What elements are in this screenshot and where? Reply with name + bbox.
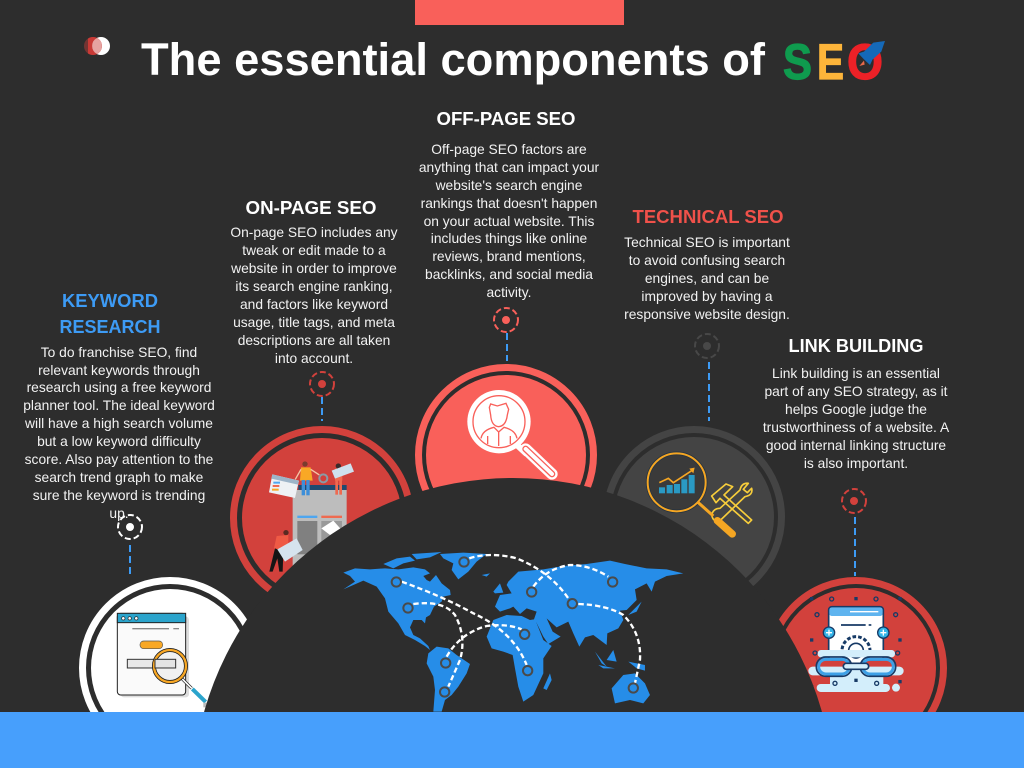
text: on-page SEO body: into account. <box>275 351 353 366</box>
heading: keyword research: KEYWORD <box>62 291 158 311</box>
text: link building body: good internal linking structure <box>766 438 946 453</box>
text: off-page SEO body: on your actual website. This <box>424 214 594 229</box>
marker: on-page SEO <box>310 372 334 396</box>
text: keyword research body: relevant keywords through <box>38 363 200 378</box>
text: link building body: is also important. <box>804 456 908 471</box>
text: off-page SEO body <box>419 142 600 300</box>
top accent bar <box>415 0 624 25</box>
text: keyword research body: score. Also pay attention to the <box>25 452 214 467</box>
text: off-page SEO body: backlinks, and social media <box>425 267 593 282</box>
text: keyword research body <box>23 345 215 521</box>
SEO logo: E <box>817 34 844 90</box>
icon: chart magnifier and tools <box>648 453 752 534</box>
text: off-page SEO body: activity. <box>487 285 531 300</box>
heading: on-page SEO: ON-PAGE SEO <box>246 198 376 218</box>
text: off-page SEO body: includes things like online <box>431 231 588 246</box>
text: on-page SEO body: its search engine ranking, <box>235 279 393 294</box>
connector: on-page SEO <box>321 397 323 421</box>
connector: keyword research <box>129 545 131 577</box>
text: off-page SEO body: rankings that doesn't happen <box>421 196 597 211</box>
semicircle: technical SEO <box>606 430 782 604</box>
text: on-page SEO body: usage, title tags, and meta <box>233 315 395 330</box>
marker: off-page SEO <box>494 308 518 332</box>
text: technical SEO body <box>624 235 790 322</box>
panel: link building <box>763 336 950 756</box>
text: keyword research body: up. <box>109 506 129 521</box>
text: on-page SEO body: On-page SEO includes any <box>230 225 398 240</box>
SEO logo: S <box>783 34 812 90</box>
text: technical SEO body: Technical SEO is important <box>624 235 790 250</box>
heading: keyword research <box>60 291 160 337</box>
panel: on-page SEO <box>230 198 410 606</box>
text: technical SEO body: engines, and can be <box>645 271 769 286</box>
heading: keyword research: RESEARCH <box>60 317 160 337</box>
SEO logo <box>783 34 885 90</box>
text: off-page SEO body: reviews, brand mentions, <box>432 249 586 264</box>
text: off-page SEO body: website's search engine <box>435 178 583 193</box>
panel: keyword research <box>23 291 258 756</box>
connector: off-page SEO <box>506 333 508 361</box>
text: on-page SEO body: and factors like keyword <box>240 297 388 312</box>
text: link building body <box>763 366 950 471</box>
text: off-page SEO body: Off-page SEO factors are <box>431 142 587 157</box>
text: on-page SEO body: tweak or edit made to a <box>242 243 386 258</box>
marker: link building <box>842 489 866 513</box>
text: keyword research body: sure the keyword is trending <box>33 488 205 503</box>
connector: technical SEO <box>708 362 710 421</box>
icon: rocket <box>858 41 885 66</box>
panel: off-page SEO <box>418 109 600 542</box>
semicircle: link building <box>768 580 944 756</box>
semicircle: keyword research <box>82 580 258 756</box>
connector: link building <box>854 517 856 576</box>
text: on-page SEO body: descriptions are all taken <box>238 333 390 348</box>
marker: keyword research <box>118 515 142 539</box>
marker: technical SEO <box>695 334 719 358</box>
map: dashed routes <box>402 555 640 687</box>
text: technical SEO body: improved by having a <box>641 289 773 304</box>
text: keyword research body: To do franchise SEO, find <box>41 345 197 360</box>
text: off-page SEO body: anything that can impact your <box>419 160 600 175</box>
title: The essential components of <box>141 34 766 85</box>
world map with routes <box>343 552 683 712</box>
text: link building body: helps Google judge the <box>785 402 927 417</box>
text: keyword research body: but a low keyword difficulty <box>37 434 201 449</box>
heading: link building: LINK BUILDING <box>788 336 924 356</box>
icon: magnifier with person <box>467 390 552 474</box>
text: keyword research body: search trend graph to make <box>35 470 204 485</box>
bottom blue bar <box>0 712 1024 768</box>
text: keyword research body: research using a free keyword <box>27 380 211 395</box>
text: keyword research body: planner tool. The ideal keyword <box>23 398 215 413</box>
text: on-page SEO body <box>230 225 398 366</box>
icon: overlapping circles <box>84 37 110 55</box>
text: on-page SEO body: website in order to improve <box>230 261 397 276</box>
map: continents <box>343 552 683 712</box>
semicircle: off-page SEO <box>418 368 594 542</box>
semicircle: on-page SEO <box>234 430 410 606</box>
panel: technical SEO <box>606 207 790 604</box>
SEO logo: O <box>847 34 883 90</box>
text: technical SEO body: to avoid confusing search <box>629 253 785 268</box>
text: link building body: part of any SEO strategy, as it <box>764 384 948 399</box>
heading: technical SEO: TECHNICAL SEO <box>632 207 784 227</box>
map: route nodes <box>392 557 638 697</box>
text: link building body: Link building is an essential <box>772 366 940 381</box>
heading: off-page SEO: OFF-PAGE SEO <box>436 109 576 129</box>
central dome <box>194 478 832 768</box>
text: link building body: trustworthiness of a website. A <box>763 420 950 435</box>
text: keyword research body: will have a high search volume <box>24 416 213 431</box>
icon: web page with chain link <box>808 597 904 692</box>
text: technical SEO body: responsive website design. <box>624 307 790 322</box>
icon: website building with people <box>269 461 354 572</box>
icon: browser with magnifier <box>117 613 209 707</box>
